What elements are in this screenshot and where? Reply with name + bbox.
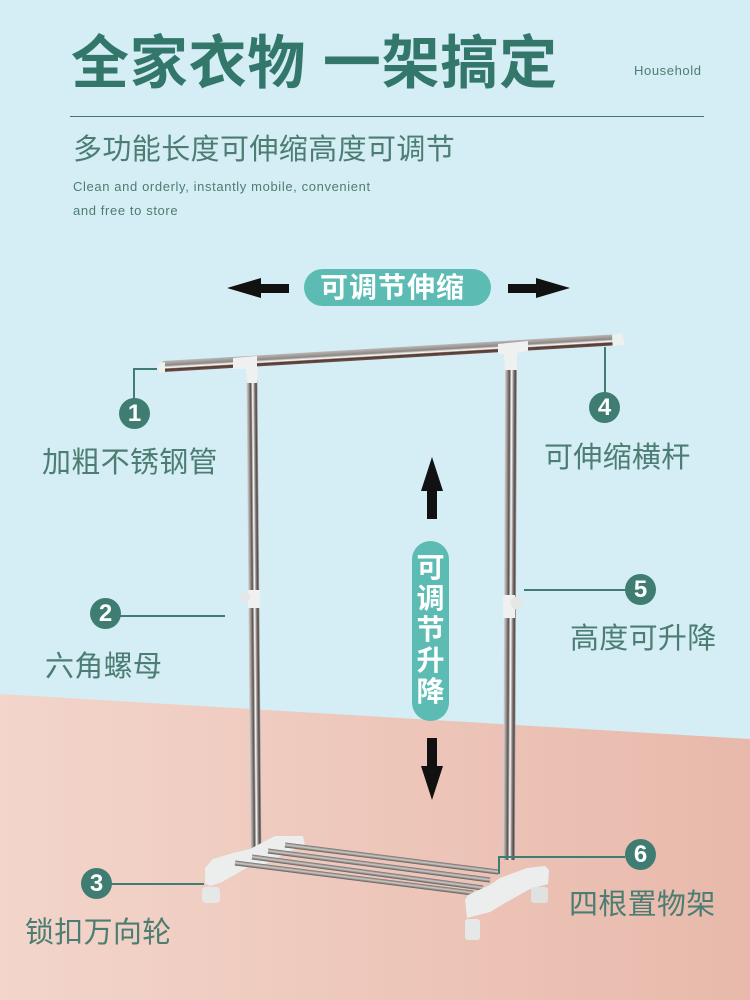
badge 6 [625,839,656,870]
right upright [503,370,517,860]
badge 1: 1 [128,400,141,427]
label 6: 四根置物架 [569,889,716,921]
left upright [247,380,262,850]
label 1: 加粗不锈钢管 [42,447,218,479]
badge 4 [589,392,620,423]
pill: adjustable height: 降 [416,676,444,707]
pill: adjustable height: 调 [416,583,444,614]
badge 5: 5 [634,576,647,603]
right base [465,866,549,918]
badge 4: 4 [598,394,611,421]
crossbar end caps [157,362,165,373]
english description: Clean and orderly, instantly mobile, convenient [73,179,371,194]
label 3: 锁扣万向轮 [25,917,172,949]
badge 3: 3 [90,870,103,897]
english description: and free to store [73,203,178,218]
label 4: 可伸缩横杆 [544,442,691,474]
badge 1 [119,398,150,429]
pill: adjustable height: 节 [416,614,444,645]
label 2: 六角螺母 [45,651,162,683]
label: Household: Household [634,63,702,78]
badge 5 [625,574,656,605]
left base [205,836,305,886]
badge 2: 2 [99,600,112,627]
badge 2 [90,598,121,629]
english description [73,179,371,218]
T joints [233,356,258,383]
header divider [70,116,704,117]
telescopic crossbar [163,335,613,372]
casters [202,887,220,903]
pill: adjustable height: 可 [416,552,444,583]
subtitle: 多功能长度可伸缩高度可调节 [73,134,455,166]
badge 6: 6 [634,841,647,868]
pill: adjustable width [304,269,491,306]
pill: adjustable height: 升 [416,645,444,676]
badge 3 [81,868,112,899]
height clamps [248,590,260,608]
label 5: 高度可升降 [570,623,717,655]
pill: adjustable width: 可调节伸缩 [320,272,465,303]
shelf tubes [285,843,499,875]
pill: adjustable height [412,541,449,721]
title: 全家衣物 一架搞定 [71,31,558,96]
